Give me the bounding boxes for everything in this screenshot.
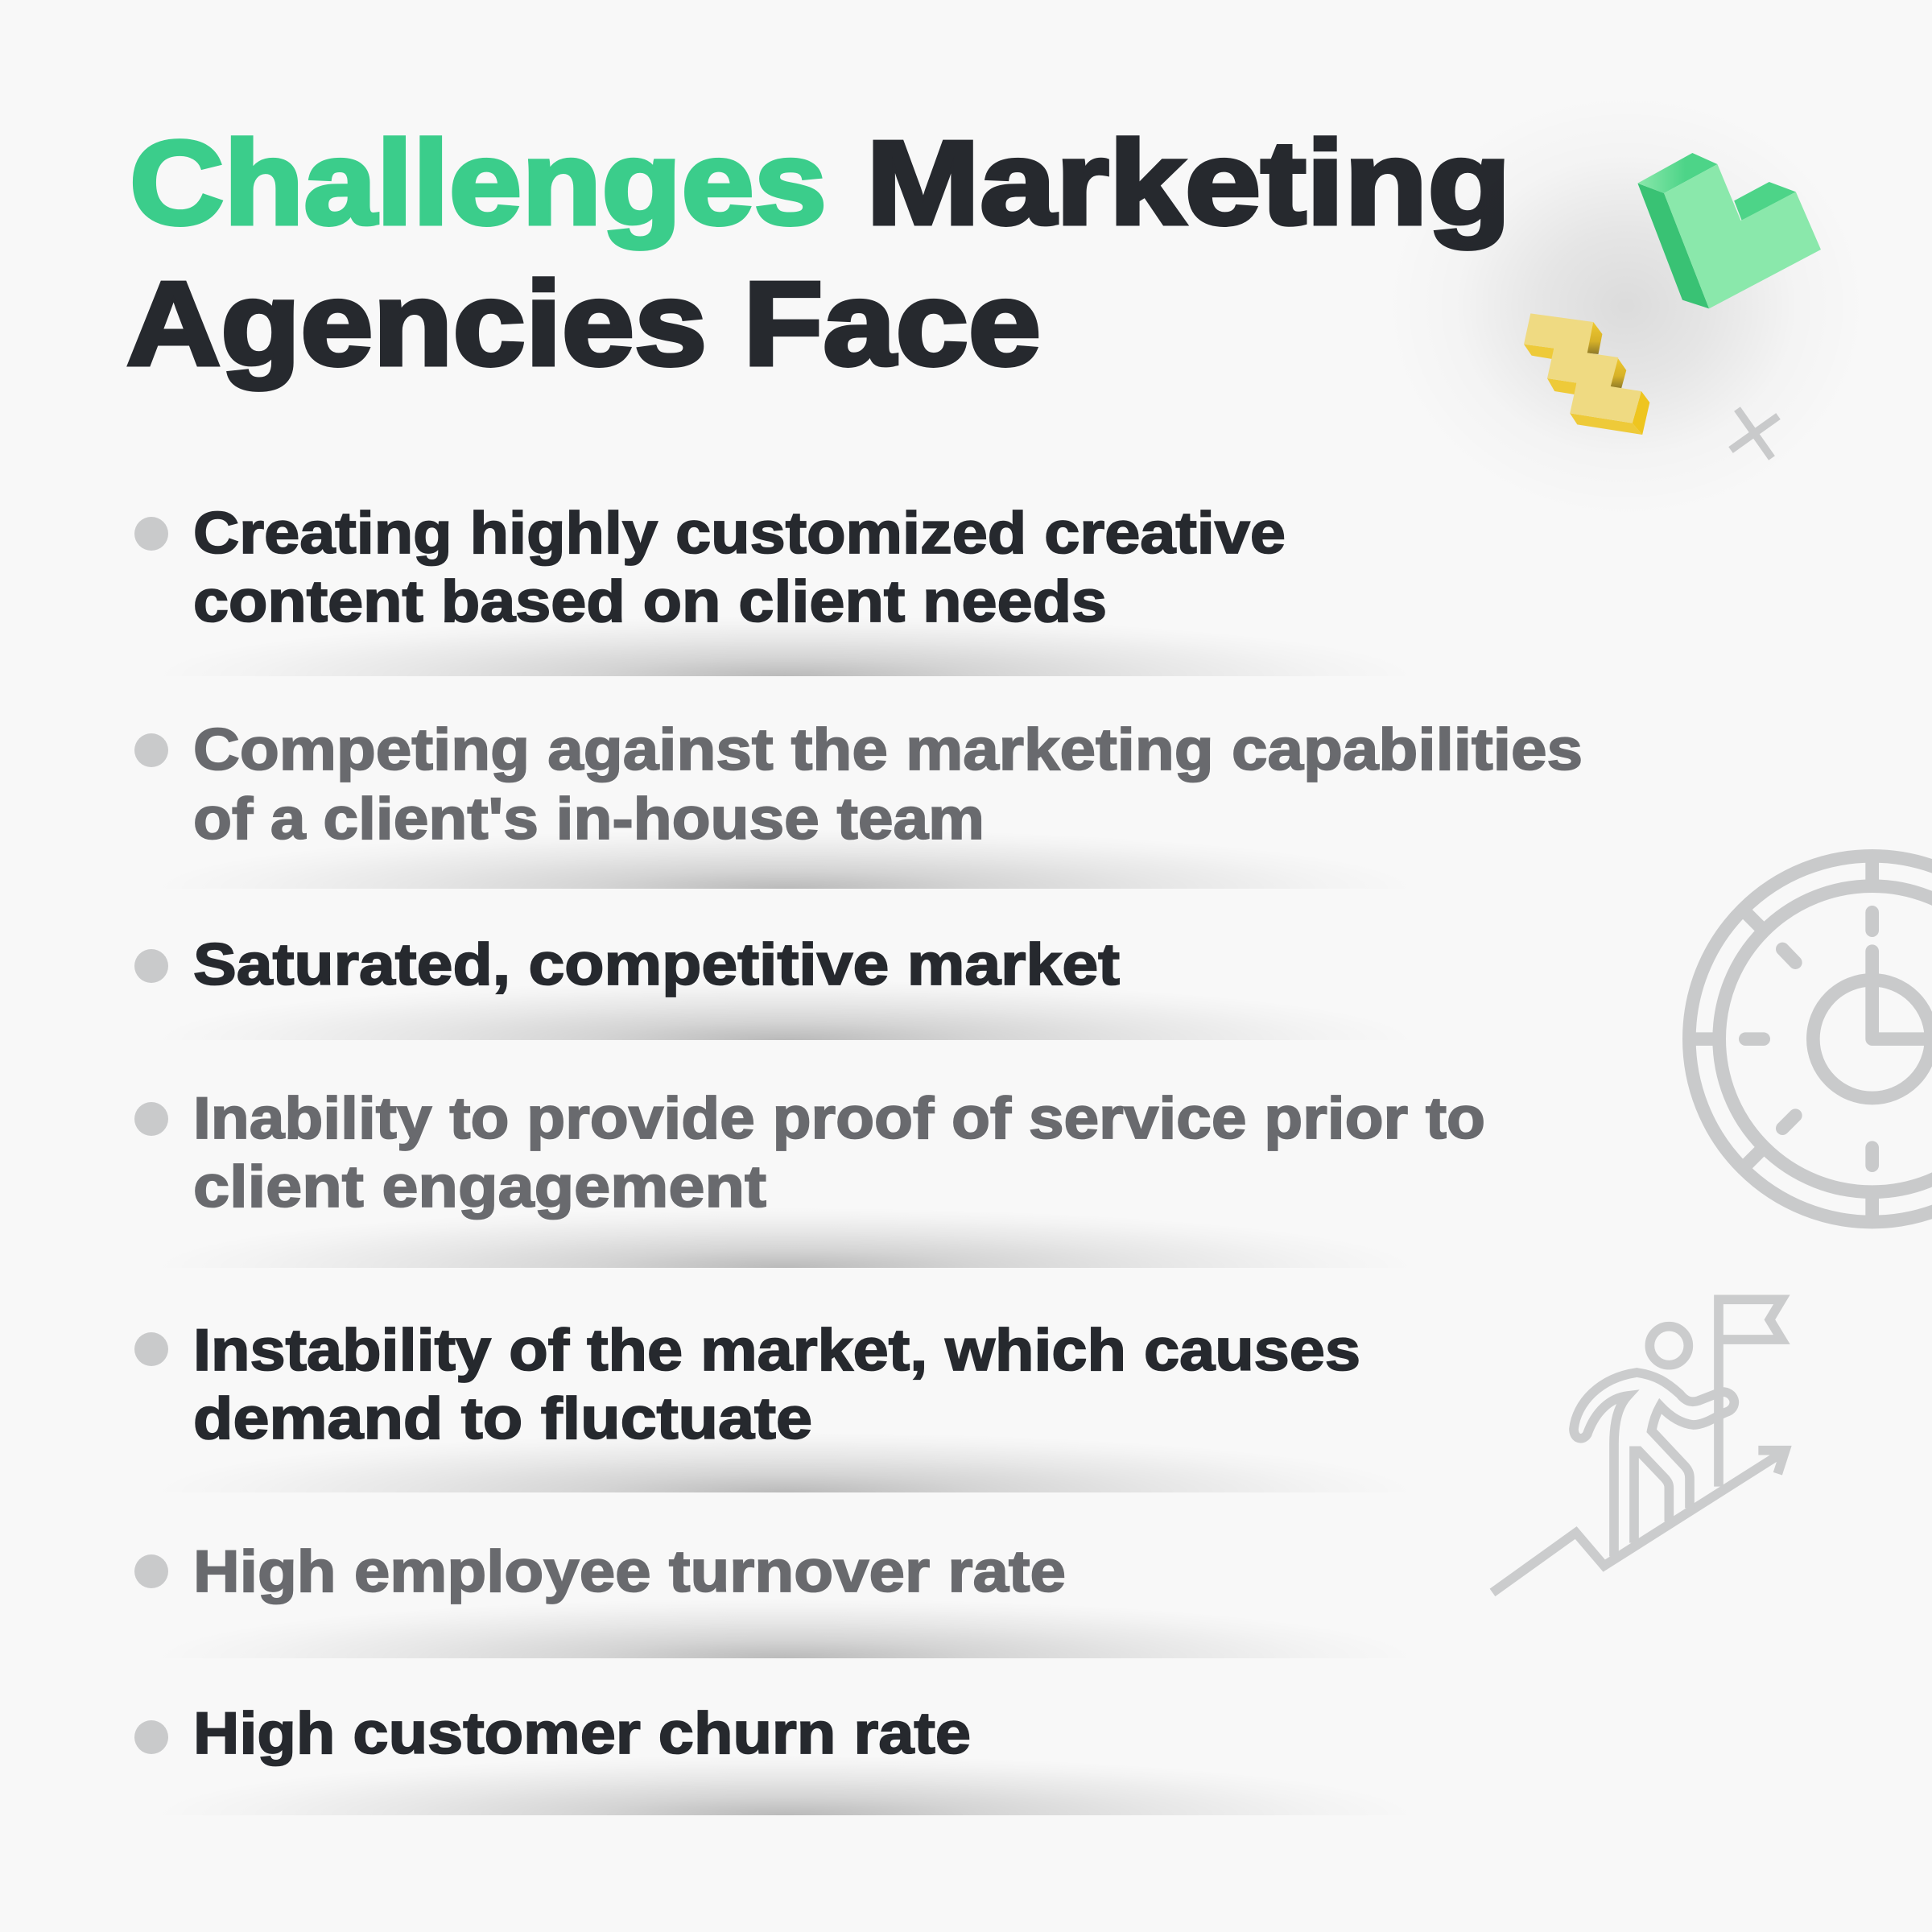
shadow divider	[153, 828, 1417, 889]
bullet	[134, 1332, 168, 1366]
item 5 text: demand to fluctuate	[193, 1386, 812, 1451]
icon: green 3D check block	[1637, 153, 1821, 308]
icon: clock	[1689, 856, 1932, 1222]
shadow divider	[153, 1598, 1417, 1658]
icon: yellow 3D zigzag block	[1524, 313, 1649, 435]
shadow divider	[153, 1432, 1417, 1492]
item 3	[134, 932, 1417, 1040]
bullet	[134, 517, 168, 551]
title word: Challenges: Challenges	[130, 117, 827, 250]
shadow divider	[153, 616, 1417, 676]
item 2 text	[193, 717, 1583, 852]
item 2 text: Competing against the marketing capabilities	[193, 717, 1583, 782]
rear leg	[1634, 1451, 1669, 1543]
bullet	[134, 949, 168, 983]
item 2 text: of a client's in-house team	[193, 786, 985, 852]
item 4 text: client engagement	[193, 1154, 766, 1220]
item 4	[134, 1086, 1485, 1268]
shadow divider	[153, 1755, 1417, 1815]
item 7	[134, 1701, 1417, 1815]
decorative shapes cluster	[1385, 93, 1868, 519]
shadow divider	[153, 1208, 1417, 1268]
item 3 text: Saturated, competitive market	[193, 932, 1120, 997]
bullet	[134, 1554, 168, 1588]
arrow head	[1758, 1451, 1785, 1474]
title line 2: Agencies Face	[126, 258, 1041, 390]
shadow divider	[153, 980, 1417, 1040]
soft shadow blob	[1385, 93, 1868, 519]
item 1 text: Creating highly customized creative	[193, 501, 1286, 566]
item 6 text: High employee turnover rate	[193, 1539, 1066, 1604]
item 4 text: Inability to provide proof of service prior to	[193, 1086, 1485, 1151]
item 1	[134, 501, 1417, 676]
title word: Marketing: Marketing	[866, 117, 1511, 250]
item 1 text: content based on client needs	[193, 569, 1107, 634]
head	[1649, 1327, 1688, 1365]
item list	[134, 501, 1583, 1815]
title	[126, 117, 1511, 390]
item 1 text	[193, 501, 1286, 634]
rising arrow	[1492, 1452, 1783, 1592]
bullet	[134, 733, 168, 767]
icon: grey cross	[1731, 409, 1778, 458]
item 5 text	[193, 1318, 1360, 1451]
flag	[1719, 1299, 1781, 1487]
item 5	[134, 1318, 1417, 1492]
bullet	[134, 1720, 168, 1754]
item 2	[134, 717, 1583, 889]
bullet	[134, 1102, 168, 1136]
item 4 text	[193, 1086, 1485, 1220]
item 5 text: Instability of the market, which causes	[193, 1318, 1360, 1383]
item 6	[134, 1539, 1417, 1658]
icon: climber with flag	[1492, 1299, 1785, 1592]
body and arm	[1574, 1373, 1734, 1556]
item 7 text: High customer churn rate	[193, 1701, 971, 1766]
